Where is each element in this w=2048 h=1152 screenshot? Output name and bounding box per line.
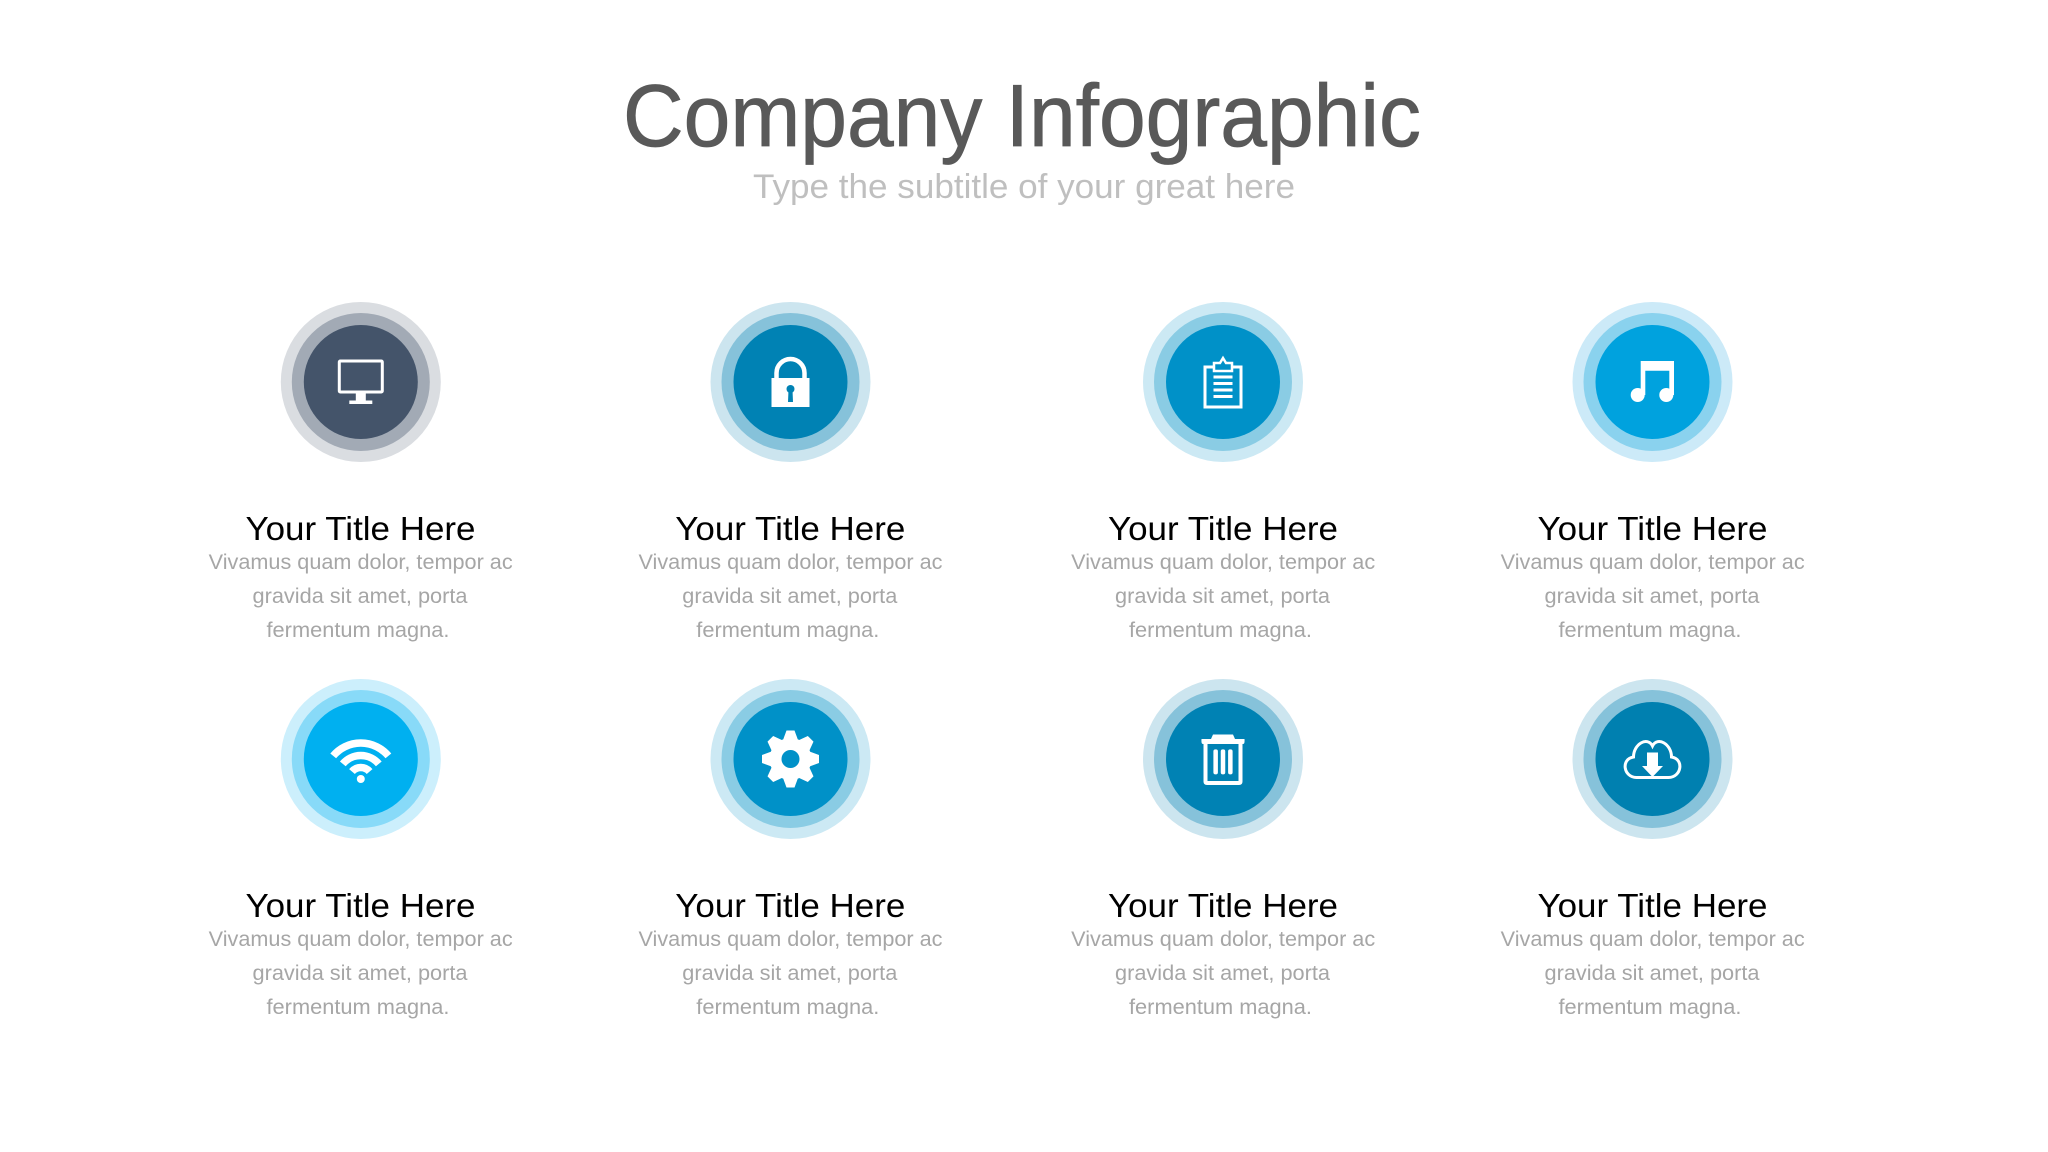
heading: Your Title Here: [1108, 887, 1338, 924]
text block: [1501, 551, 1805, 642]
text block: gravida sit amet, porta: [252, 585, 468, 608]
text block: [209, 928, 513, 1019]
text block: Vivamus quam dolor, tempor ac: [1071, 928, 1375, 951]
heading: Your Title Here: [1538, 510, 1768, 547]
heading: Your Title Here: [675, 510, 905, 547]
text block: Vivamus quam dolor, tempor ac: [1071, 551, 1375, 574]
heading: Your Title Here: [1538, 887, 1768, 924]
heading: Your Title Here: [246, 510, 476, 547]
icon: monitor badge: [281, 302, 441, 462]
text block: Vivamus quam dolor, tempor ac: [209, 551, 513, 574]
panel: item 3 clipboard: [1071, 302, 1375, 642]
heading: Your Title Here: [675, 887, 905, 924]
subtitle: Type the subtitle of your great here: [753, 168, 1295, 206]
text block: fermentum magna.: [696, 996, 879, 1019]
text block: Vivamus quam dolor, tempor ac: [638, 551, 942, 574]
text block: gravida sit amet, porta: [1544, 585, 1760, 608]
text block: fermentum magna.: [1129, 619, 1312, 642]
text block: gravida sit amet, porta: [1115, 585, 1330, 608]
text block: gravida sit amet, porta: [1544, 962, 1760, 985]
text block: [209, 551, 513, 642]
heading: Your Title Here: [246, 887, 476, 924]
text block: fermentum magna.: [1558, 996, 1742, 1019]
panel: item 6 gear: [638, 679, 942, 1019]
text block: Vivamus quam dolor, tempor ac: [209, 928, 513, 951]
text block: fermentum magna.: [266, 996, 450, 1019]
panel: item 8 cloud download: [1501, 679, 1805, 1019]
text block: Vivamus quam dolor, tempor ac: [638, 928, 942, 951]
text block: fermentum magna.: [266, 619, 450, 642]
icon: wifi badge: [281, 679, 441, 839]
panel: item 7 trash: [1071, 679, 1375, 1019]
panel: item 1 monitor: [209, 302, 513, 642]
heading: Your Title Here: [1108, 510, 1338, 547]
panel: item 2 lock: [638, 302, 942, 642]
title: Company Infographic: [623, 66, 1421, 165]
text block: gravida sit amet, porta: [682, 585, 898, 608]
icon: cloud download badge: [1572, 679, 1732, 839]
text block: fermentum magna.: [1558, 619, 1742, 642]
icon: music badge: [1572, 302, 1732, 462]
icon: lock badge: [710, 302, 870, 462]
icon: gear badge: [710, 679, 870, 839]
text block: gravida sit amet, porta: [252, 962, 468, 985]
icon: trash badge: [1143, 679, 1303, 839]
text block: fermentum magna.: [1129, 996, 1312, 1019]
text block: gravida sit amet, porta: [1115, 962, 1330, 985]
text block: [638, 551, 942, 642]
text block: [638, 928, 942, 1019]
text block: [1501, 928, 1805, 1019]
text block: [1071, 551, 1375, 642]
text block: fermentum magna.: [696, 619, 879, 642]
icon: clipboard badge: [1143, 302, 1303, 462]
panel: item 5 wifi: [209, 679, 513, 1019]
text block: Vivamus quam dolor, tempor ac: [1501, 551, 1805, 574]
text block: [1071, 928, 1375, 1019]
panel: item 4 music: [1501, 302, 1805, 642]
text block: gravida sit amet, porta: [682, 962, 898, 985]
text block: Vivamus quam dolor, tempor ac: [1501, 928, 1805, 951]
